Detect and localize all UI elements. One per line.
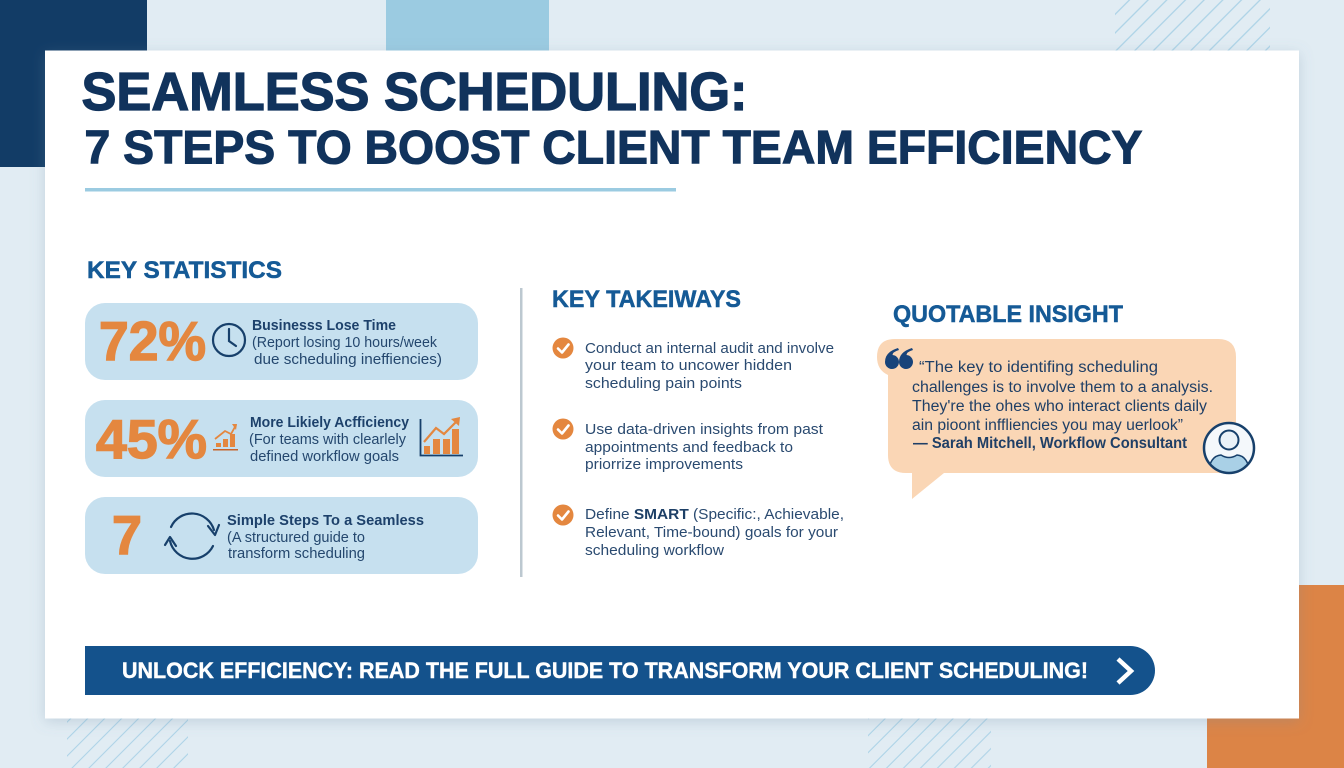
stat card: 7: Simple Steps To a Seamless — [227, 513, 424, 529]
heading: key takeaways: KEY TAKEIWAYS — [552, 286, 741, 313]
takeaway 2: Use data-driven insights from past — [585, 421, 824, 438]
decoration: light blue block — [386, 0, 549, 51]
takeaway 3 — [552, 504, 844, 559]
speech bubble — [877, 339, 1236, 499]
quote text: challenges is to involve them to a analysis. — [912, 379, 1213, 396]
decoration: bottom left hatching — [67, 718, 188, 768]
quote text: “The key to identifing scheduling — [919, 359, 1158, 376]
icon: small growth chart — [213, 424, 238, 450]
icon: check — [552, 504, 574, 526]
stat card: 72% — [85, 303, 478, 380]
stat card: 7 — [85, 497, 478, 574]
takeaway 3: Relevant, Time-bound) goals for your — [585, 524, 838, 541]
icon: avatar — [1204, 423, 1254, 476]
takeaway 1: Conduct an internal audit and involve — [585, 340, 834, 357]
takeaway 1: scheduling pain points — [585, 375, 742, 392]
stat card: 72%: 72% — [99, 310, 206, 372]
stat card: 45%: (For teams with clearlely — [249, 432, 407, 448]
title — [82, 63, 1142, 174]
icon: chevron — [1118, 659, 1131, 683]
panel: key takeaways — [552, 286, 844, 559]
decoration: bottom right hatching — [868, 718, 991, 768]
title: 7 STEPS TO BOOST CLIENT TEAM EFFICIENCY — [84, 120, 1142, 174]
decoration: navy block — [0, 0, 147, 167]
quote text — [912, 359, 1213, 452]
stat card: 45%: 45% — [96, 408, 207, 470]
icon: quotation mark — [885, 348, 913, 369]
panel: quotable insight — [877, 301, 1254, 499]
takeaway 1 — [552, 338, 834, 392]
quote text: — Sarah Mitchell, Workflow Consultant — [913, 435, 1187, 452]
stat card: 45%: defined workflow goals — [250, 449, 399, 465]
stat card: 45%: More Likiely Acfficiency — [250, 415, 409, 431]
heading: quotable insight: QUOTABLE INSIGHT — [893, 301, 1123, 328]
call to action banner: UNLOCK EFFICIENCY: READ THE FULL GUIDE TO TRANSFORM YOUR CLIENT SCHEDULING! — [122, 658, 1088, 683]
title underline — [85, 188, 676, 192]
takeaway 2: appointments and feedback to — [585, 439, 793, 456]
stat card: 72%: (Report losing 10 hours/week — [252, 335, 438, 351]
heading: key statistics: KEY STATISTICS — [87, 257, 282, 284]
takeaway 2 — [552, 418, 824, 473]
decoration: top right hatching — [1115, 0, 1270, 51]
takeaway 3: scheduling workflow — [585, 542, 724, 559]
title: SEAMLESS SCHEDULING: — [82, 63, 748, 122]
takeaway 2: priorrize improvements — [585, 456, 743, 473]
stat card: 7: transform scheduling — [228, 546, 365, 562]
icon: large growth chart — [420, 417, 463, 456]
column divider — [520, 288, 522, 577]
takeaway 1: your team to uncower hidden — [585, 357, 792, 374]
stat card: 7: (A structured guide to — [227, 530, 365, 546]
call to action banner — [85, 646, 1155, 695]
decoration: orange block — [1207, 585, 1344, 768]
takeaway 3: Define SMART (Specific:, Achievable, — [585, 506, 844, 523]
stat card: 45% — [85, 400, 478, 477]
icon: refresh arrows — [165, 514, 219, 559]
quote text: They're the ohes who interact clients daily — [912, 398, 1207, 415]
stat card: 72%: Businesss Lose Time — [252, 318, 396, 334]
stat card: 72%: due scheduling ineffiencies) — [254, 352, 442, 368]
icon: check — [552, 338, 574, 358]
stat card: 7: 7 — [112, 504, 142, 566]
quote text: ain pioont inffliencies you may uerlook” — [912, 417, 1183, 434]
icon: clock — [213, 324, 245, 356]
icon: check — [552, 418, 574, 440]
panel: key statistics — [85, 257, 478, 574]
